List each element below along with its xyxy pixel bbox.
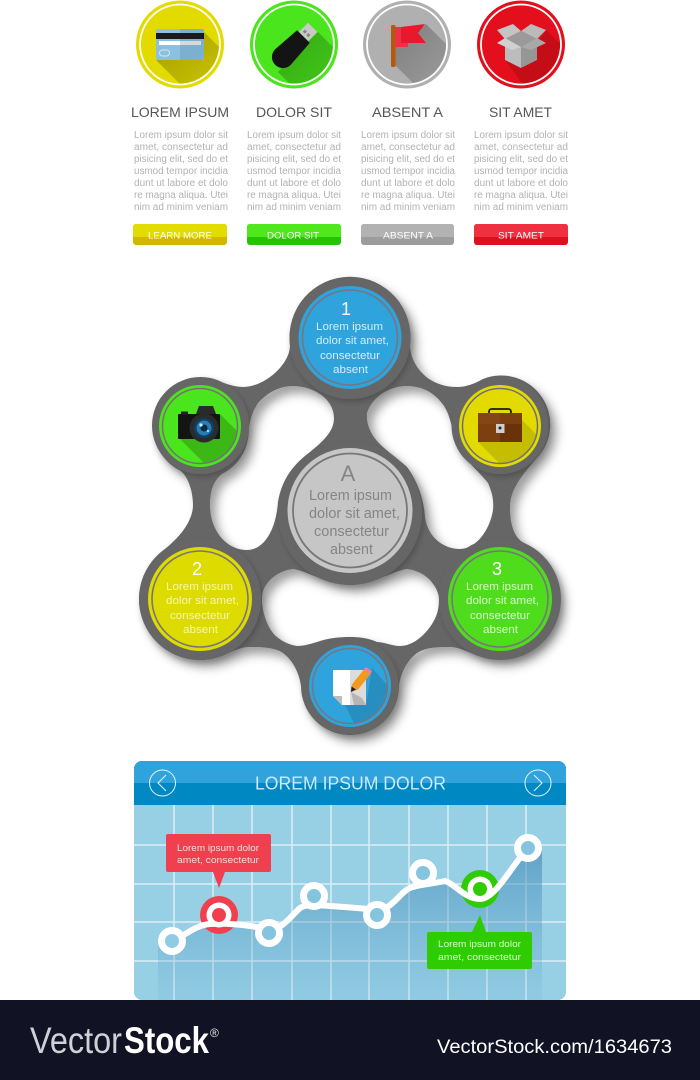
text block: absent a description: usmod tempor incidia <box>361 166 455 177</box>
callout: green: Lorem ipsum dolor <box>438 939 521 950</box>
node 3 green: absent <box>483 624 518 636</box>
button: learn more <box>133 224 227 245</box>
callout: red <box>166 834 271 888</box>
node 3 green: consectetur <box>470 610 530 622</box>
heading: dolor sit: DOLOR SIT <box>256 104 332 120</box>
text block: sit amet description <box>474 130 568 213</box>
button: dolor sit <box>247 224 341 245</box>
icon: credit card badge <box>136 0 224 88</box>
node 3 green: Lorem ipsum <box>466 581 533 593</box>
node 3 green <box>439 538 561 660</box>
text block: lorem ipsum description <box>134 130 228 213</box>
text block: lorem ipsum description: dunt ut labore et dolo <box>134 178 228 189</box>
arrow: previous <box>150 770 176 796</box>
text block: lorem ipsum description: amet, consectetur ad <box>134 142 228 153</box>
footer: watermark bar: Vector <box>30 1020 122 1061</box>
node: briefcase icon <box>451 385 552 478</box>
text block: dolor sit description: nim ad minim veniam <box>247 202 341 213</box>
red highlighted point disc <box>200 896 238 934</box>
node 2 yellow: dolor sit amet, <box>166 595 239 607</box>
node 2 yellow: 2 <box>192 559 202 579</box>
connected gray blob shape <box>139 277 560 735</box>
text block: sit amet description: nim ad minim veniam <box>474 202 568 213</box>
area under line <box>158 848 542 1000</box>
text block: sit amet description: Lorem ipsum dolor sit <box>474 130 568 141</box>
text block: dolor sit description: pisicing elit, sed do et <box>247 154 341 165</box>
icon: open box badge <box>477 0 565 88</box>
button: sit amet: SIT AMET <box>498 230 544 242</box>
node 3 green: dolor sit amet, <box>466 595 539 607</box>
header bar: LOREM IPSUM DOLOR <box>255 774 446 794</box>
center node A: A <box>341 461 356 486</box>
text block: sit amet description: usmod tempor incidia <box>474 166 568 177</box>
callout: red: amet, consectetur <box>177 855 259 866</box>
center node A: Lorem ipsum <box>309 488 392 504</box>
text block: dolor sit description: re magna aliqua. Utei <box>247 190 341 201</box>
text block: absent a description: nim ad minim veniam <box>361 202 455 213</box>
node: camera icon <box>152 377 260 479</box>
text block: dolor sit description <box>247 130 341 213</box>
node 2 yellow: consectetur <box>170 610 230 622</box>
text block: absent a description: pisicing elit, sed do et <box>361 154 455 165</box>
text block: sit amet description: dunt ut labore et dolo <box>474 178 568 189</box>
center node A: consectetur <box>314 524 389 540</box>
panel: feature column dolor sit <box>247 0 341 245</box>
panel: line chart card <box>134 761 566 1000</box>
node 1 blue: absent <box>333 364 368 376</box>
text block: dolor sit description: usmod tempor incidia <box>247 166 341 177</box>
heading: lorem ipsum: LOREM IPSUM <box>131 104 229 120</box>
heading: sit amet: SIT AMET <box>489 104 552 120</box>
header bar <box>134 761 566 805</box>
node 2 yellow <box>139 538 261 660</box>
text block: lorem ipsum description: nim ad minim veniam <box>134 202 228 213</box>
node: note and pencil icon <box>301 645 402 740</box>
text block: absent a description: amet, consectetur ad <box>361 142 455 153</box>
text block: dolor sit description: Lorem ipsum dolor sit <box>247 130 341 141</box>
text block: dolor sit description: dunt ut labore et dolo <box>247 178 341 189</box>
button: learn more: LEARN MORE <box>148 230 212 242</box>
text block: absent a description: dunt ut labore et dolo <box>361 178 455 189</box>
center node A: absent <box>330 542 373 558</box>
footer: watermark bar <box>0 1000 700 1080</box>
panel: connected node diagram <box>139 277 561 745</box>
button: absent a <box>361 224 454 245</box>
node 1 blue: 1 <box>341 299 351 319</box>
text block: dolor sit description: amet, consectetur ad <box>247 142 341 153</box>
text block: lorem ipsum description: pisicing elit, sed do et <box>134 154 228 165</box>
chart background <box>134 761 566 1000</box>
text block: sit amet description: pisicing elit, sed do et <box>474 154 568 165</box>
footer: watermark bar: Stock <box>124 1020 209 1061</box>
text block: lorem ipsum description: re magna aliqua. Utei <box>134 190 228 201</box>
callout: green: amet, consectetur <box>438 952 521 963</box>
node 1 blue: dolor sit amet, <box>316 335 389 347</box>
node 1 blue: Lorem ipsum <box>316 321 383 333</box>
node 2 yellow: absent <box>183 624 218 636</box>
center node A: dolor sit amet, <box>309 506 400 522</box>
panel: feature column sit amet <box>474 0 568 245</box>
text block: lorem ipsum description: usmod tempor incidia <box>134 166 228 177</box>
text block: absent a description: re magna aliqua. Utei <box>361 190 455 201</box>
node 3 green: 3 <box>492 559 502 579</box>
text block: lorem ipsum description: Lorem ipsum dolor sit <box>134 130 228 141</box>
node 2 yellow: Lorem ipsum <box>166 581 233 593</box>
icon: flag badge <box>363 0 451 88</box>
center node A <box>278 441 422 585</box>
text block: absent a description <box>361 130 455 213</box>
text block: sit amet description: re magna aliqua. Utei <box>474 190 568 201</box>
callout: red: Lorem ipsum dolor <box>177 843 259 854</box>
arrow: next <box>525 770 551 796</box>
icon: usb stick badge <box>250 0 338 88</box>
heading: absent a: ABSENT A <box>372 104 444 120</box>
button: dolor sit: DOLOR SIT <box>267 230 319 242</box>
node 1 blue <box>290 278 410 399</box>
button: sit amet <box>474 224 568 245</box>
button: absent a: ABSENT A <box>383 230 434 242</box>
white line chart <box>162 838 538 952</box>
text block: sit amet description: amet, consectetur ad <box>474 142 568 153</box>
text block: absent a description: Lorem ipsum dolor sit <box>361 130 455 141</box>
panel: feature column lorem ipsum <box>132 0 228 245</box>
panel: feature column absent a <box>361 0 455 245</box>
footer: watermark bar: VectorStock.com/1634673 <box>437 1037 672 1058</box>
callout: green <box>427 915 532 969</box>
footer: watermark bar: ® <box>210 1026 219 1040</box>
node 1 blue: consectetur <box>320 350 380 362</box>
